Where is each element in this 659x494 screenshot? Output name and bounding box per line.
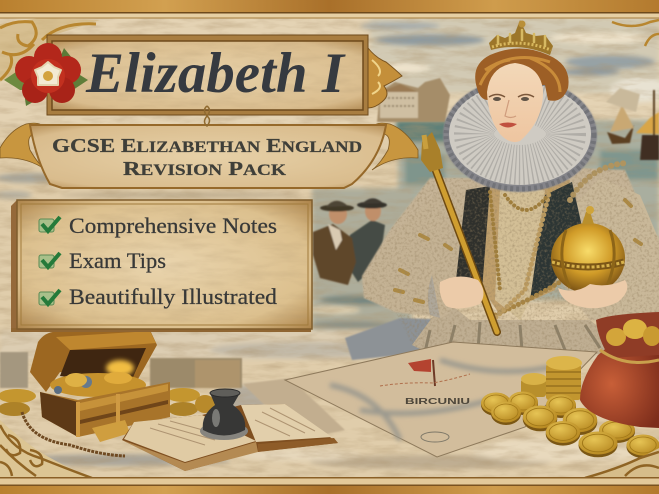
flourishes (0, 123, 46, 170)
subtitle text: GCSE E LIZABETHAN ENGLAND (52, 135, 362, 157)
treasure chest (30, 330, 170, 442)
distant town buildings (377, 78, 450, 122)
red coin sack (580, 312, 659, 428)
wooden frame bottom (0, 477, 659, 494)
item: comprehensive notes: Comprehensive Notes (69, 213, 277, 238)
item: beautifully illustrated: Beautifully Illustrated (69, 284, 277, 309)
inkwell (200, 389, 248, 440)
crown (489, 20, 553, 55)
gown train sweep (345, 318, 462, 360)
chest box (40, 382, 170, 437)
table sheet behind the book (243, 378, 345, 440)
sceptre (421, 132, 497, 332)
orb (551, 206, 625, 293)
chest lid (30, 330, 157, 392)
title text: Elizabeth I (85, 42, 346, 105)
queen Elizabeth figure (360, 20, 659, 355)
subtitle banner: REVISION PACK (123, 158, 287, 180)
coin stacks and loose coins (481, 356, 659, 458)
hair (475, 48, 569, 101)
small ornament between banners (204, 106, 210, 126)
map label: BIRCUNIU (405, 397, 470, 406)
item: exam tips: Exam Tips (69, 248, 166, 273)
title banner (47, 35, 402, 115)
wooden frame top (0, 0, 659, 18)
chest lock (92, 420, 130, 442)
map on the table (285, 342, 597, 457)
face (487, 63, 543, 142)
subtitle banner (0, 123, 418, 188)
open book (122, 404, 338, 471)
right hand (558, 280, 627, 308)
left hand (440, 276, 484, 309)
wall block behind chest (0, 352, 242, 388)
gown (360, 163, 659, 355)
chain on the table (22, 412, 125, 456)
checklist panel (11, 200, 312, 332)
gold coins beside chest (0, 388, 215, 416)
two men in hats (313, 198, 387, 285)
icon: Tudor rose (4, 43, 88, 106)
red flag marker (380, 359, 470, 386)
distant ships (606, 88, 659, 160)
treasure (50, 360, 146, 397)
right flourish (368, 48, 402, 108)
ruff collar (443, 78, 597, 192)
